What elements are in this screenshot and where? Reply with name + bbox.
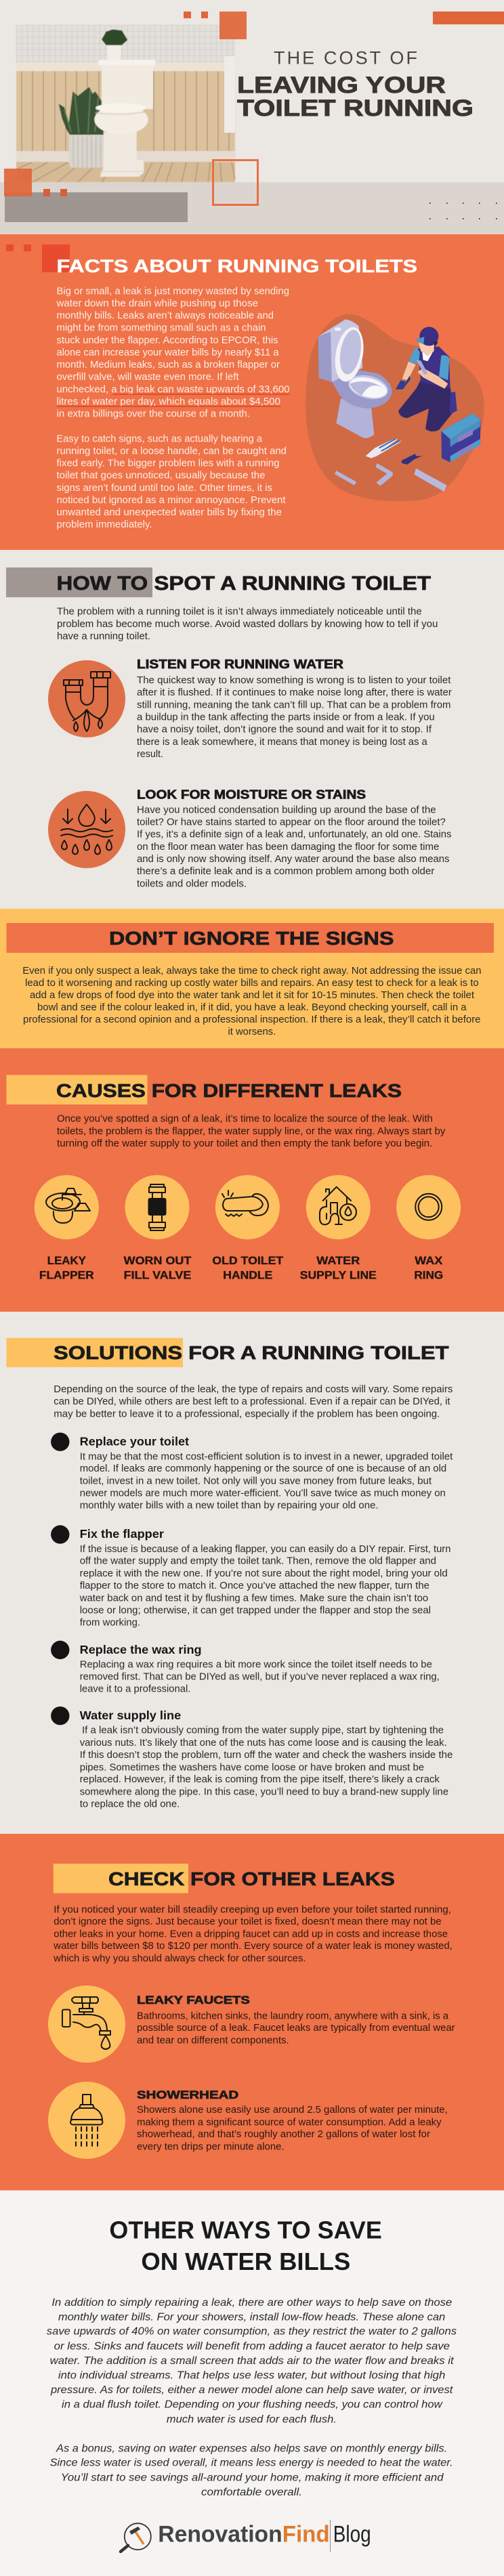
block: look for moisture or stains: there’s a definite leak and is a common problem among both older [137, 865, 434, 877]
text block: facts paragraph one: litres of water per day, which equals about $4,500 [57, 395, 280, 408]
solution: replace the wax ring: Replace the wax ring [80, 1643, 202, 1656]
text block: saving paragraph one: in a dual flush toilet. Depending on your flushing needs, you can control how [62, 2399, 443, 2411]
text block: signs body [22, 965, 481, 1037]
block: showerhead: every ten drips per minute alone. [137, 2141, 285, 2152]
solution: replace your toilet [51, 1433, 453, 1511]
text block: solutions intro [54, 1383, 453, 1419]
heading: other ways: OTHER WAYS TO SAVE [109, 2216, 382, 2244]
text block: signs body: lead to it worsening and racking up costly water bills and repairs. An easy test to check for a leak is to [25, 977, 479, 989]
text block: saving paragraph one: monthly water bills. For your showers, install low-flow heads. These alone can [58, 2311, 445, 2323]
panel: causes for different leaks [0, 1048, 504, 1312]
logo: RenovationFind Blog: Renovation [158, 2521, 282, 2547]
solution: water supply line: various nuts. It’s likely that one of the nuts has come loose and is causing the leak. [80, 1737, 447, 1748]
heading: facts: FACTS ABOUT RUNNING TOILETS [57, 256, 417, 276]
text block: causes intro: turning off the water supply to your toilet and then empty the tank before you begin. [57, 1138, 432, 1149]
text block: facts paragraph one: might be from something small such as a chain [57, 322, 266, 334]
panel: facts about running toilets [0, 234, 504, 550]
text block: check intro: other leaks in your home. Even a dripping faucet can add up in costs and increase those [54, 1928, 448, 1939]
solution: replace the wax ring: leave it to a professional. [80, 1683, 190, 1695]
text block: solutions intro: may be better to leave it to a professional, especially if the problem has been ongoing. [54, 1409, 440, 1419]
block: listen for running water: a buildup in the tank affecting the parts inside or from a leak. If you [137, 711, 435, 723]
block: leaky faucets: Bathrooms, kitchen sinks, the laundry room, anywhere with a sink, is a [137, 2010, 449, 2021]
heading: other ways [109, 2216, 382, 2275]
text block: check intro: If you noticed your water bill steadily creeping up even before your toilet started running, [54, 1904, 451, 1915]
text block: causes intro [57, 1113, 446, 1149]
text block: facts paragraph two: running toilet, or a loose handle, can be caught and [57, 445, 287, 456]
text block: causes intro: Once you’ve spotted a sign of a leak, it’s time to localize the source of the leak. With [57, 1113, 433, 1124]
labels: causes: SUPPLY LINE [300, 1269, 377, 1281]
text block: check intro: don’t ignore the signs. Just because your toilet is fixed, doesn’t mean there may not be [54, 1916, 442, 1927]
solution: water supply line: to replace the old one. [80, 1799, 180, 1809]
text block: facts paragraph one: Big or small, a leak is just money wasted by sending [57, 285, 289, 297]
labels: causes: FILL VALVE [124, 1269, 191, 1281]
text block: facts paragraph two: unwanted and unexpected water bills by fixing the [57, 507, 282, 518]
block: look for moisture or stains [137, 788, 451, 889]
logo: RenovationFind Blog: Blog [333, 2521, 371, 2547]
block: look for moisture or stains: If yes, it’s a definite sign of a leak and, unfortunately, an old one. Stains [137, 829, 451, 840]
solution: replace your toilet: newer models are much more water-efficient. You’ll save twice as much money on [80, 1487, 446, 1499]
heading: causes: CAUSES FOR DIFFERENT LEAKS [56, 1080, 402, 1101]
block: look for moisture or stains: toilet? Or have stains started to appear on the floor around the toilet? [137, 817, 446, 828]
text block: facts paragraph one: alone can increase your water bills by nearly $11 a [57, 347, 279, 358]
labels: causes: WAX [415, 1255, 442, 1267]
solution: fix the flapper: off the water supply and empty the toilet tank. Then, remove the old flapper and [80, 1555, 436, 1567]
text block: solutions intro: Depending on the source of the leak, the type of repairs and costs will vary. Some repairs [54, 1383, 453, 1395]
title: TOILET RUNNING [237, 95, 474, 121]
labels: causes: RING [414, 1269, 443, 1281]
plumber [398, 379, 455, 431]
block: leaky faucets: and tear on different components. [137, 2034, 289, 2046]
text block: facts paragraph two: fixed early. The bigger problem lies with a running [57, 458, 279, 469]
text block: causes intro: toilets, the problem is the flapper, the water supply line, or the wax ring. Always start by [57, 1125, 446, 1137]
solution: water supply line: pipes. Sometimes the washers have come loose or have broken and must be [80, 1761, 424, 1773]
text block: saving paragraph one: save upwards of 40% on water consumption, as they restrict the water to 2 gallons [47, 2326, 457, 2338]
logo: RenovationFind Blog: Find [282, 2521, 330, 2547]
text block: intro [57, 606, 438, 642]
text block: intro: The problem with a running toilet is it isn’t always immediately noticeable until the [57, 606, 422, 618]
solution: water supply line: If this doesn’t stop the problem, turn off the water and check the washers inside the [80, 1749, 453, 1761]
text block: facts paragraph two: problem immediately. [57, 519, 152, 530]
photo: bathroom toilet [16, 25, 235, 182]
text block: saving paragraph two [50, 2443, 453, 2498]
block: look for moisture or stains: Have you noticed condensation building up around the base of the [137, 804, 436, 815]
labels: causes: WORN OUT [124, 1255, 191, 1267]
decorative orange blocks [4, 12, 504, 222]
icon: worn out fill valve [125, 1175, 190, 1239]
solution: fix the flapper [51, 1525, 450, 1628]
icon: water supply line [306, 1175, 371, 1239]
text block: signs body: it worsens. [228, 1026, 276, 1037]
labels: causes: LEAKY [47, 1255, 86, 1267]
panel: other ways to save [0, 2191, 504, 2576]
block: look for moisture or stains: LOOK FOR MOISTURE OR STAINS [137, 788, 366, 802]
illustration: plumber fixing toilet [306, 314, 484, 501]
panel: check for other leaks [0, 1834, 504, 2191]
solution: water supply line: somewhere along the pipe. In this case, you’ll need to buy a brand-new supply line [80, 1786, 448, 1797]
block: showerhead: Showers alone use easily use around 2.5 gallons of water per minute, [137, 2104, 448, 2116]
block: listen for running water: there is a leak somewhere, it means that money is being lost as a [137, 736, 427, 748]
heading: solutions: SOLUTIONS FOR A RUNNING TOILET [54, 1342, 449, 1363]
notch behind title [224, 56, 235, 133]
solution: fix the flapper: flapper to the store to match it. Once you’ve attached the new flapper, turn the [80, 1580, 429, 1591]
block: look for moisture or stains: on the floor mean water has been damaging the floor for some time [137, 841, 439, 853]
labels: causes: HANDLE [223, 1269, 272, 1281]
text block: facts paragraph one: overfill valve, will waste even more. If left [57, 371, 239, 383]
text block: saving paragraph one [47, 2297, 457, 2426]
logo: RenovationFind Blog [121, 2520, 371, 2552]
icon: leaky faucet [48, 1985, 125, 2063]
block: showerhead: showerhead, and that’s roughly another 2 gallons of water lost for [137, 2128, 430, 2140]
block: showerhead: SHOWERHEAD [137, 2088, 238, 2101]
panel: don't ignore the signs [0, 909, 504, 1048]
panel: header [0, 0, 504, 234]
labels: causes [39, 1255, 443, 1281]
heading: don't ignore: DON’T IGNORE THE SIGNS [109, 928, 394, 949]
toilet [336, 398, 374, 438]
solution: replace your toilet: toilet, invest in a new toilet. Not only will you save money from future leaks, but [80, 1475, 432, 1486]
block: showerhead: making them a significant source of water consumption. Add a leaky [137, 2116, 442, 2128]
toolbox [441, 413, 481, 463]
solution: replace your toilet: monthly water bills with a new toilet than by repairing your old one. [80, 1500, 379, 1511]
heading: other ways: ON WATER BILLS [141, 2248, 350, 2275]
solution: replace your toilet: model. If leaks are commonly happening or the source of one is because of an old [80, 1463, 446, 1474]
solution: water supply line [51, 1706, 453, 1809]
block: listen for running water: result. [137, 748, 163, 760]
solution: replace the wax ring: Replacing a wax ring requires a bit more work since the toilet itself needs to be [80, 1658, 432, 1670]
solution: replace your toilet: Replace your toilet [80, 1434, 189, 1448]
text block: check intro: which is why you should always check for other sources. [53, 1952, 306, 1964]
text block: facts paragraph two: signs aren’t found until too late. Other times, it is [57, 482, 272, 494]
block: look for moisture or stains: and is only now showing itself. Any water around the base also means [137, 853, 450, 865]
text block: intro: problem has become much worse. Avoid wasted dollars by knowing how to tell if you [57, 618, 438, 630]
text block: intro: have a running toilet. [57, 630, 150, 642]
panel: how to spot a running toilet [0, 550, 504, 909]
solution: fix the flapper: from working. [80, 1616, 140, 1628]
block: listen for running water: still running, meaning the tank can’t fill up. That can be a problem from [137, 699, 450, 710]
text block: facts paragraph two: noticed but ignored as a minor annoyance. Prevent [57, 494, 286, 506]
text block: check intro [53, 1904, 453, 1964]
block: leaky faucets [137, 1994, 455, 2046]
title: LEAVING YOUR [237, 72, 446, 98]
block: listen for running water: The quickest way to know something is wrong is to listen to your toilet [137, 674, 451, 686]
text block: facts paragraph one: stuck under the flapper. According to EPCOR, this [57, 335, 278, 346]
text block: saving paragraph one: into individual streams. That helps use less water, but without losing that high [58, 2369, 445, 2381]
text block: signs body: Even if you only suspect a leak, always take the time to check right away. Not addressing the issue can [22, 965, 481, 976]
text block: facts paragraph one: monthly bills. Leaks aren’t always noticeable and [57, 310, 274, 322]
labels: causes: FLAPPER [39, 1269, 94, 1281]
icon: old toilet handle [215, 1175, 280, 1239]
solution: fix the flapper: If the issue is because of a leaking flapper, you can easily do a DIY repair. First, turn [80, 1543, 450, 1555]
text block: facts paragraph one [56, 285, 289, 420]
title: THE COST OF [274, 47, 417, 68]
text block: facts paragraph two [57, 433, 287, 530]
block: listen for running water: after it is flushed. If it continues to make noise long after, there is water [137, 687, 452, 698]
solution: replace the wax ring [51, 1641, 440, 1695]
solution: replace the wax ring: removed first. That can be DIYed as well, but if you’ve never replaced a wax ring, [80, 1671, 440, 1682]
text block: signs body: professional for a second opinion and a professional inspection. If there is a leak, they’ll catch it before [23, 1014, 481, 1025]
solution: fix the flapper: replace it with the new one. If you’re not sure about the right model, bring your old [80, 1568, 448, 1579]
labels: causes: OLD TOILET [212, 1255, 283, 1267]
solution: water supply line: If a leak isn’t obviously coming from the water supply pipe, start by tightening the [82, 1724, 444, 1736]
solution: replace your toilet: It may be that the most cost-efficient solution is to invest in a newer, upgraded toilet [80, 1451, 453, 1462]
block: leaky faucets: possible source of a leak. Faucet leaks are typically from eventual wear [137, 2022, 455, 2034]
icon: leaky flapper [35, 1175, 99, 1239]
solution: water supply line: Water supply line [80, 1709, 181, 1722]
text block: saving paragraph two: As a bonus, saving on water expenses also helps save on monthly energy bills. [56, 2443, 447, 2454]
icon: leaking pipe [48, 660, 125, 737]
text block: facts paragraph one: unchecked, a big leak can waste upwards of 33,600 [57, 383, 290, 395]
block: listen for running water: LISTEN FOR RUNNING WATER [137, 658, 343, 671]
text block: saving paragraph two: Since less water is used overall, it means less energy is needed to heat the water. [50, 2457, 453, 2469]
block: leaky faucets: LEAKY FAUCETS [137, 1994, 250, 2006]
solution: water supply line: replaced. However, if the leak is coming from the pipe itself, there’s likely a crack [80, 1774, 440, 1785]
tools [366, 438, 400, 458]
text block: facts paragraph two: Easy to catch signs, such as actually hearing a [57, 433, 263, 444]
block: listen for running water [137, 658, 452, 760]
title [237, 47, 474, 121]
panel: solutions for a running toilet [0, 1312, 504, 1834]
heading: check: CHECK FOR OTHER LEAKS [108, 1868, 395, 1889]
solution: fix the flapper: loose or long; otherwise, it can get trapped under the flapper and stop the seal [80, 1604, 431, 1616]
labels: causes: WATER [316, 1255, 360, 1267]
text block: facts paragraph one: in extra billings over the course of a month. [57, 408, 250, 420]
text block: saving paragraph one: In addition to simply repairing a leak, there are other ways to help save on those [51, 2297, 452, 2309]
text block: saving paragraph two: comfortable overall. [201, 2487, 302, 2498]
text block: saving paragraph one: or less. Sinks and faucets will benefit from adding a faucet aerator to help save [54, 2340, 450, 2353]
block: look for moisture or stains: toilets and older models. [137, 878, 247, 889]
solution: fix the flapper: Fix the flapper [80, 1527, 164, 1541]
icon: moisture drops [48, 791, 125, 868]
text block: saving paragraph one: water. The addition is a small screen that adds air to the water flow and breaks it [50, 2355, 454, 2367]
solution: fix the flapper: water back on and test it by flushing a few times. Make sure the chain isn’t too [79, 1592, 428, 1604]
text block: signs body: bowl and see if the colour leaked in, if it did, you have a leak. Beyond checking yourself, call in a [37, 1002, 467, 1013]
text block: solutions intro: can be DIYed, while others are best left to a professional. Even if a repair can be DIYed, it [54, 1396, 450, 1407]
text block: saving paragraph one: much water is used for each flush. [167, 2413, 337, 2426]
icon: showerhead [48, 2082, 125, 2159]
text block: signs body: add a few drops of food dye into the water tank and let it sit for 10-15 minutes. Then check the toilet [30, 989, 475, 1001]
icon: wax ring [396, 1175, 461, 1239]
text block: check intro: water bills between $8 to $120 per month. Every source of a water leak is money wasted, [53, 1940, 453, 1952]
text block: saving paragraph one: pressure. As for toilets, either a newer model alone can help save water, or invest [50, 2384, 453, 2396]
text block: saving paragraph two: You’ll start to see savings all-around your home, making it more efficient and [61, 2472, 444, 2484]
block: listen for running water: have a noisy toilet, don’t ignore the sound and wait for it to stop. If [137, 724, 432, 735]
text block: facts paragraph two: toilet that goes unnoticed, usually because the [57, 470, 266, 481]
text block: facts paragraph one: water down the drain while pushing up those [56, 297, 258, 309]
text block: facts paragraph one: month. Medium leaks, such as a broken flapper or [57, 359, 280, 370]
heading: how to spot: HOW TO SPOT A RUNNING TOILET [57, 573, 431, 595]
block: showerhead [137, 2088, 448, 2152]
